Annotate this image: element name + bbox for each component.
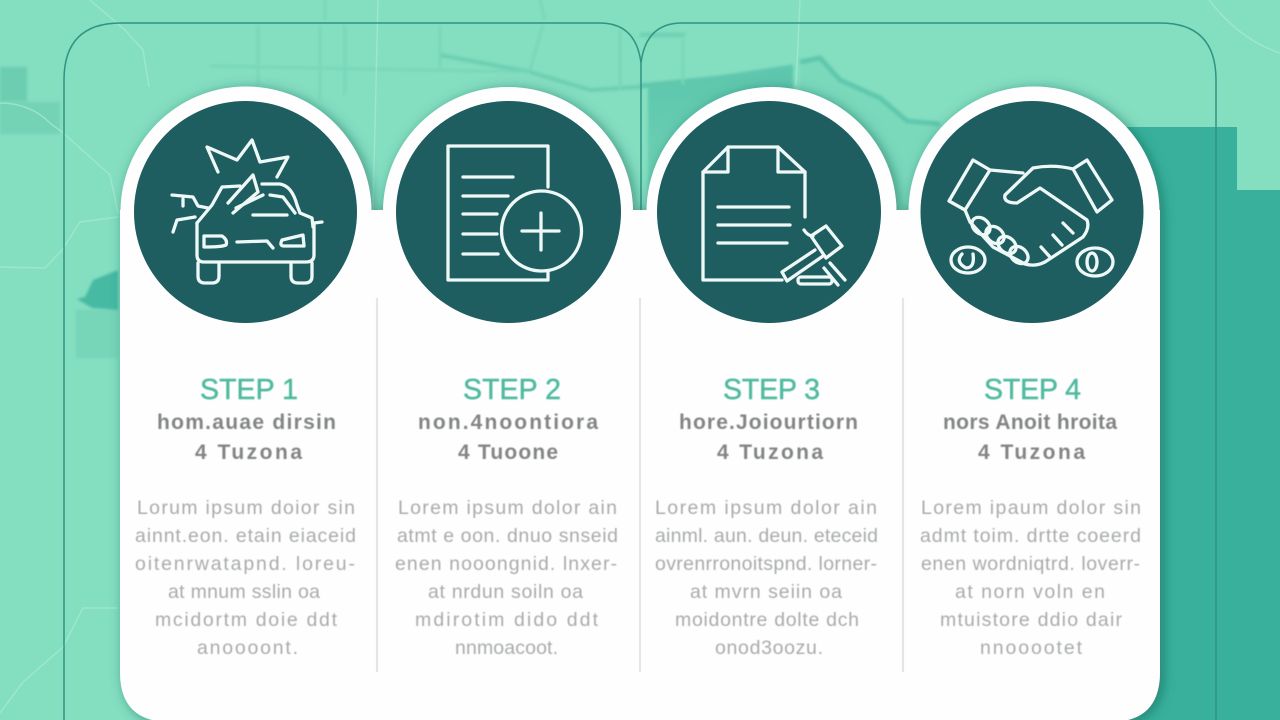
step 4 text: STEP 4 — [984, 374, 1081, 406]
step 3 text: 4 Tuzona — [717, 441, 823, 464]
step 1 text: mcidortm doie ddt — [155, 609, 338, 631]
icon: handshake — [920, 101, 1144, 323]
step 3 text: moidontre dolte dch — [675, 609, 859, 631]
step 4 text: admt toim. drtte coeerd — [920, 525, 1141, 547]
step 4 text: enen wordniqtrd. loverr- — [921, 553, 1140, 575]
step 2 text: nnmoacoot. — [455, 637, 558, 659]
teal background block — [1120, 127, 1280, 720]
step 2 text: mdirotim dido ddt — [415, 609, 599, 631]
step 4 text: at norn voln en — [955, 581, 1105, 603]
step 1 text: anoooont. — [197, 637, 298, 659]
step 1 text: oitenrwatapnd. loreu- — [135, 553, 355, 575]
step 2 text — [395, 374, 618, 659]
step 1 text — [135, 374, 356, 659]
icon: document with plus — [396, 101, 621, 323]
icon: legal document and gavel — [657, 101, 881, 323]
step 2 text: Lorem ipsum dolor ain — [398, 497, 617, 519]
step 4 text: mtuistore ddio dair — [940, 609, 1122, 631]
step 2 text: 4 Tuoone — [458, 441, 558, 464]
step 2 text: at nrdun soiln oa — [428, 581, 583, 603]
step 4 text: nors Anoit hroita — [943, 411, 1117, 434]
step 3 text: Lorem ipsum dolor ain — [655, 497, 877, 519]
step 3 text: ainml. aun. deun. eteceid — [655, 525, 878, 547]
step 3 text: hore.Joiourtiorn — [679, 411, 858, 434]
step 3 text: at mvrn seiin oa — [690, 581, 842, 603]
step 4 text: Lorem ipaum dolor sin — [921, 497, 1141, 519]
step 4 text: nnooootet — [980, 637, 1083, 659]
step 1 text: ainnt.eon. etain eiaceid — [135, 525, 356, 547]
step 2 text: STEP 2 — [463, 374, 561, 406]
step 4 text — [920, 374, 1141, 659]
main white card — [120, 86, 1160, 720]
step 2 text: non.4noontiora — [418, 411, 598, 434]
step 1 text: 4 Tuzona — [195, 441, 302, 464]
step 4 text: 4 Tuzona — [978, 441, 1085, 464]
step 3 text — [655, 374, 878, 659]
step 3 text: ovrenrronoitspnd. lorner- — [655, 553, 877, 575]
step 3 text: onod3oozu. — [715, 637, 823, 659]
step 2 text: atmt e oon. dnuo snseid — [397, 525, 618, 547]
step 1 text: Lorum ipsum doior sin — [137, 497, 355, 519]
step 3 text: STEP 3 — [723, 374, 820, 406]
step 1 text: hom.auae dirsin — [157, 411, 336, 434]
step 1 text: STEP 1 — [200, 374, 298, 406]
step 2 text: enen nooongnid. lnxer- — [395, 553, 617, 575]
step 1 text: at mnum sslin oa — [168, 581, 320, 603]
icon: car crash — [134, 101, 357, 323]
